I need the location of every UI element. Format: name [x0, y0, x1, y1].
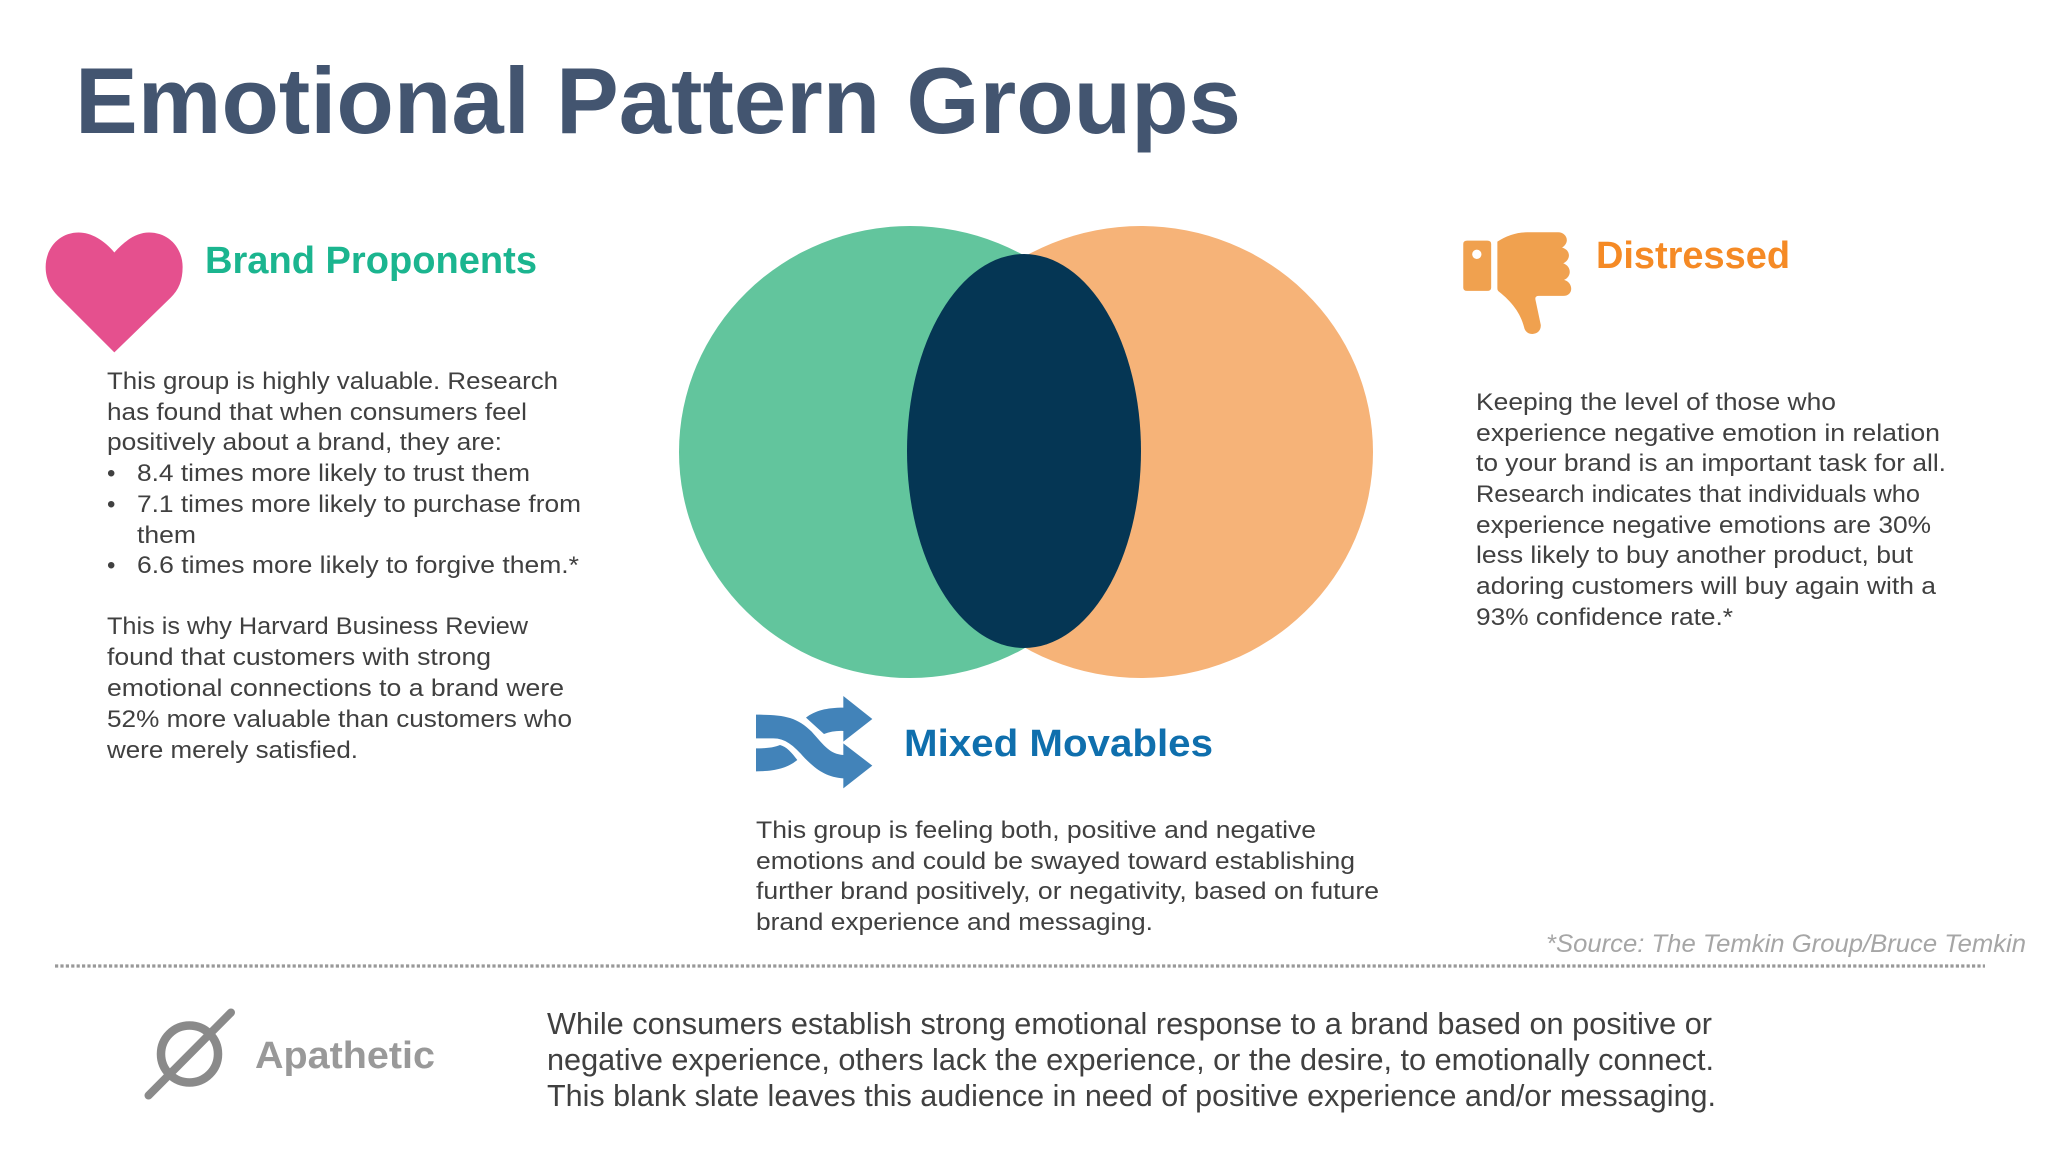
- text block: apathetic description: This blank slate leaves this audience in need of positive experience and/or messaging.: [547, 1078, 1716, 1113]
- text block: brand proponents body: 52% more valuable than customers who: [107, 706, 572, 733]
- text block: brand proponents body: has found that when consumers feel: [107, 399, 527, 426]
- text block: brand proponents body: This group is highly valuable. Research: [107, 368, 558, 395]
- panel: distressed: [1463, 232, 1946, 631]
- icon: shuffle arrows: [756, 696, 872, 788]
- text block: mixed movables body: [756, 817, 1379, 936]
- heading: brand proponents: Brand Proponents: [205, 240, 537, 282]
- text block: brand proponents body: 7.1 times more likely to purchase from: [137, 491, 581, 518]
- text block: brand proponents body: emotional connections to a brand were: [107, 675, 564, 702]
- text block: brand proponents body: •: [107, 491, 115, 518]
- circle: distressed: [909, 226, 1373, 678]
- text block: brand proponents body: [106, 368, 581, 764]
- panel: mixed movables: [756, 696, 1379, 936]
- icon: thumbs down: [1463, 232, 1571, 334]
- overlap: mixed movables: [907, 254, 1141, 648]
- text block: brand proponents body: •: [107, 460, 115, 487]
- text block: mixed movables body: further brand positively, or negativity, based on future: [756, 878, 1379, 905]
- text block: distressed body: [1476, 389, 1946, 631]
- text block: distressed body: Keeping the level of those who: [1476, 389, 1836, 416]
- title: Emotional Pattern Groups: [75, 48, 1241, 153]
- text block: distressed body: adoring customers will buy again with a: [1476, 573, 1937, 600]
- text block: brand proponents body: them: [137, 522, 196, 549]
- source note: *Source: The Temkin Group/Bruce Temkin: [1546, 930, 2026, 958]
- text block: brand proponents body: found that customers with strong: [107, 644, 491, 671]
- text block: apathetic description: [547, 1006, 1716, 1113]
- text block: brand proponents body: •: [107, 552, 115, 579]
- text block: brand proponents body: 8.4 times more likely to trust them: [137, 460, 530, 487]
- venn diagram: [679, 226, 1373, 678]
- text block: brand proponents body: were merely satisfied.: [106, 737, 358, 764]
- heading: apathetic: Apathetic: [255, 1035, 435, 1077]
- text block: distressed body: Research indicates that individuals who: [1476, 481, 1920, 508]
- text block: brand proponents body: This is why Harvard Business Review: [107, 613, 529, 640]
- text block: distressed body: 93% confidence rate.*: [1476, 604, 1733, 631]
- text block: distressed body: experience negative emotions are 30%: [1476, 512, 1931, 539]
- heading: mixed movables: Mixed Movables: [904, 723, 1213, 765]
- heading: distressed: Distressed: [1596, 235, 1790, 277]
- panel: brand proponents: [46, 233, 581, 764]
- text block: distressed body: experience negative emotion in relation: [1476, 420, 1940, 447]
- text block: apathetic description: negative experience, others lack the experience, or the desire, to emotionally connect.: [547, 1042, 1714, 1077]
- text block: mixed movables body: This group is feeling both, positive and negative: [756, 817, 1316, 844]
- icon: empty set: [148, 1012, 231, 1096]
- text block: distressed body: less likely to buy another product, but: [1476, 542, 1913, 569]
- text block: apathetic description: While consumers establish strong emotional response to a brand based on positive or: [547, 1006, 1712, 1041]
- icon: heart: [46, 233, 183, 352]
- text block: mixed movables body: brand experience and messaging.: [756, 909, 1153, 936]
- text block: distressed body: to your brand is an important task for all.: [1476, 450, 1946, 477]
- circle: brand proponents: [679, 226, 1141, 678]
- text block: brand proponents body: 6.6 times more likely to forgive them.*: [137, 552, 579, 579]
- panel: apathetic: [148, 1012, 435, 1096]
- text block: brand proponents body: positively about a brand, they are:: [107, 429, 502, 456]
- text block: mixed movables body: emotions and could be swayed toward establishing: [756, 848, 1355, 875]
